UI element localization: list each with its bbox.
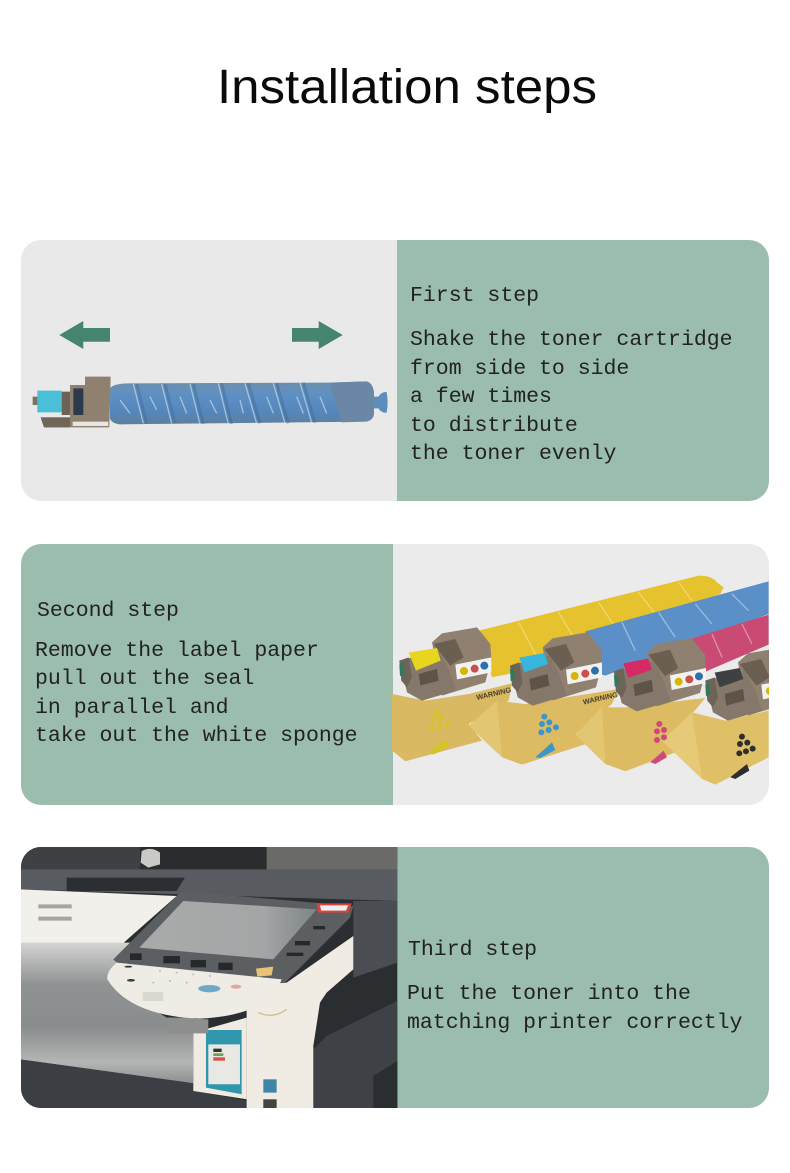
illustration: printer control panel	[20, 846, 397, 1109]
module: yellow	[399, 627, 491, 701]
text: third step: Third step	[408, 938, 537, 962]
illustration: four toner cartridges on boxes: WARNING	[475, 685, 512, 702]
title: Installation steps	[217, 61, 597, 114]
text: first step: First step	[410, 284, 539, 308]
box: yellow	[392, 683, 512, 761]
text: first step: to distribute	[410, 414, 578, 438]
box: cyan	[469, 689, 619, 765]
icon: right arrow	[292, 321, 343, 349]
box: black	[662, 711, 769, 785]
illustration: four toner cartridges on boxes	[392, 576, 790, 785]
module: cyan	[510, 632, 602, 706]
text: third step	[407, 938, 743, 1035]
box: magenta	[575, 698, 705, 771]
text: first step: Shake the toner cartridge	[410, 328, 733, 352]
text: second step: Second step	[37, 599, 179, 623]
text: second step: pull out the seal	[35, 667, 254, 691]
icon: left arrow	[59, 321, 110, 349]
text: second step: in parallel and	[35, 696, 229, 720]
text: first step: from side to side	[410, 357, 629, 381]
illustration: cyan toner cartridge	[33, 377, 388, 427]
text: first step	[410, 284, 733, 466]
panel: second step	[21, 544, 790, 805]
illustration: four toner cartridges on boxes: WARNING	[582, 690, 619, 707]
text: second step: Remove the label paper	[35, 639, 319, 663]
text: first step: the toner evenly	[410, 442, 617, 466]
text: third step: Put the toner into the	[407, 982, 691, 1006]
panel: third step	[20, 846, 769, 1109]
text: second step	[35, 599, 358, 748]
text: second step: take out the white sponge	[35, 724, 358, 748]
module: black	[705, 650, 769, 720]
module: magenta	[614, 638, 706, 711]
text: third step: matching printer correctly	[407, 1011, 743, 1035]
panel: first step	[21, 240, 769, 501]
text: first step: a few times	[410, 385, 552, 409]
